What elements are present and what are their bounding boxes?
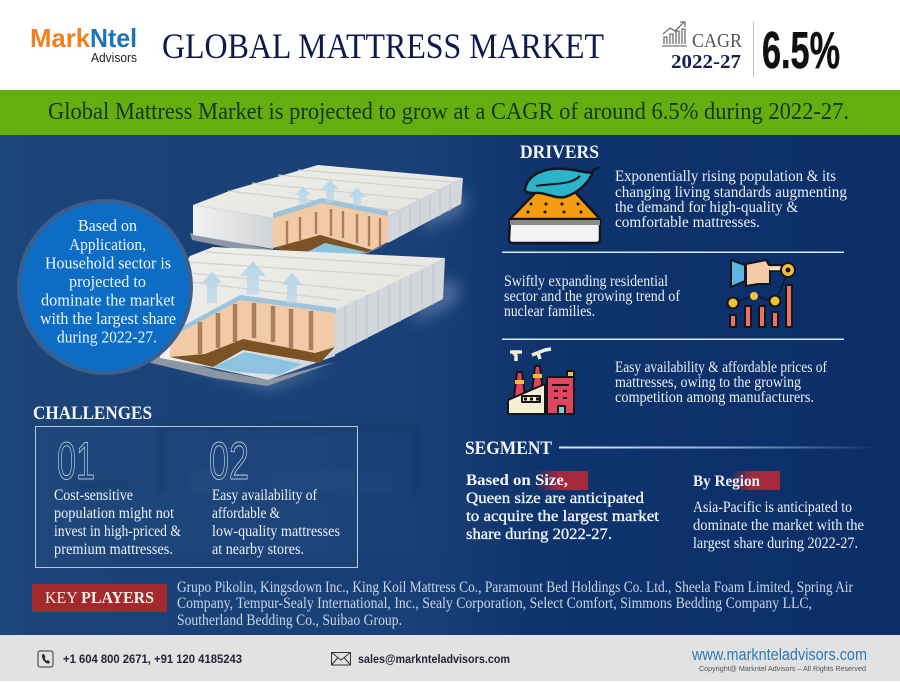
main blue background (0, 135, 900, 635)
drivers heading: DRIVERS (520, 142, 599, 163)
segment: by size: Based on Size, (466, 472, 568, 489)
glow behind mattresses (150, 190, 470, 390)
driver text 2: Swiftly expanding residential (504, 273, 668, 290)
driver text 2: sector and the growing trend of (504, 288, 681, 305)
cutaway foam (170, 300, 335, 357)
segment: by size (466, 471, 660, 543)
CAGR badge: 2022-27 (671, 51, 741, 73)
segment: by region: Asia-Pacific is anticipated to (693, 499, 852, 516)
driver text 1 (615, 168, 847, 231)
email: sales@marknteladvisors.com (358, 654, 510, 666)
callout circle: application: projected to (69, 272, 146, 291)
icon: hand pointing at chart (728, 260, 795, 327)
icon: mattress with feather (509, 167, 600, 243)
bottom mattress arrows (202, 261, 302, 304)
driver text 3 (615, 359, 828, 406)
bottom mattress (147, 247, 445, 386)
segment: by region: By Region (693, 473, 760, 490)
icon: phone (38, 651, 53, 667)
challenge 01: population might not (54, 505, 175, 522)
driver text 2: nuclear families. (504, 303, 595, 320)
segment: by region: dominate the market with the (693, 517, 864, 534)
key players label (32, 584, 167, 612)
callout circle: application: Application, (69, 235, 146, 254)
green banner (0, 90, 900, 135)
callout circle: application: dominate the market (41, 290, 175, 310)
challenge 02 (209, 432, 340, 558)
top mattress (190, 165, 463, 268)
driver text 1: changing living standards augmenting (615, 184, 847, 201)
segment heading: SEGMENT (465, 438, 552, 459)
callout circle: application: during 2022-27. (57, 328, 157, 346)
challenges heading: CHALLENGES (33, 404, 152, 424)
challenge 02: Easy availability of (212, 487, 318, 504)
driver text 2 (504, 273, 681, 320)
title: GLOBAL MATTRESS MARKET (162, 26, 604, 66)
key players list: Southerland Bedding Co., Suibao Group. (177, 612, 402, 629)
segment: by region (693, 471, 864, 552)
callout circle: application: with the largest share (40, 309, 176, 328)
bedroom backdrop (70, 424, 460, 584)
icon: envelope (332, 652, 350, 665)
logo: MarkNtel Advisors: Mark (30, 23, 91, 53)
callout circle: application: Household sector is (45, 254, 171, 272)
challenge 02: 02 (209, 432, 249, 491)
cutaway foam (273, 203, 388, 250)
CAGR badge (662, 22, 840, 80)
top mattress arrows (295, 180, 366, 206)
segment: by size: Queen size are anticipated (466, 490, 644, 507)
mattress illustration (147, 165, 470, 390)
challenge 01: 01 (57, 432, 95, 491)
challenge 01: premium mattresses. (54, 541, 173, 558)
icon: factory (508, 349, 574, 414)
icon: growth chart (662, 22, 687, 46)
CAGR badge: CAGR (692, 30, 743, 52)
challenge 01: invest in high-priced & (54, 523, 181, 540)
segment: by region: largest share during 2022-27. (693, 535, 858, 552)
phone numbers: +1 604 800 2671, +91 120 4185243 (63, 654, 242, 666)
footer (0, 635, 900, 683)
driver text 1: Exponentially rising population & its (615, 168, 836, 185)
challenge 02: low-quality mattresses (212, 523, 340, 540)
logo: MarkNtel Advisors: Advisors (91, 50, 137, 65)
callout circle: application: Based on (78, 216, 137, 235)
challenge 02: affordable & (212, 505, 280, 522)
key players list (177, 579, 854, 629)
driver text 1: the demand for high-quality & (615, 199, 798, 216)
key players list: Company, Tempur-Sealy International, Inc., Sealy Corporation, Select Comfort, Simmons Bedding Company LLC, (177, 595, 812, 612)
header background (0, 0, 900, 90)
key players label: KEY PLAYERS (45, 588, 154, 607)
green banner: Global Mattress Market is projected to grow at a CAGR of around 6.5% during 2022-27. (48, 99, 849, 125)
challenge 01 (54, 432, 181, 558)
challenge 01: Cost-sensitive (54, 487, 133, 504)
logo: MarkNtel Advisors: Ntel (90, 23, 137, 53)
website: www.marknteladvisors.com (691, 646, 867, 664)
driver text 3: competition among manufacturers. (615, 389, 814, 406)
segment: by size: to acquire the largest market (466, 508, 660, 525)
copyright: Copyright@ Markntel Advisors – All Rights Reserved (699, 664, 866, 673)
panel: challenges (36, 426, 358, 568)
segment: by size: share during 2022-27. (466, 526, 612, 543)
driver text 3: Easy availability & affordable prices of (615, 359, 828, 376)
driver text 3: mattresses, owing to the growing (615, 374, 801, 391)
callout circle: application (17, 199, 193, 375)
logo: MarkNtel Advisors (30, 23, 137, 65)
driver text 1: comfortable mattresses. (615, 214, 760, 231)
CAGR badge: 6.5% (762, 22, 840, 80)
challenge 02: at nearby stores. (212, 541, 304, 558)
